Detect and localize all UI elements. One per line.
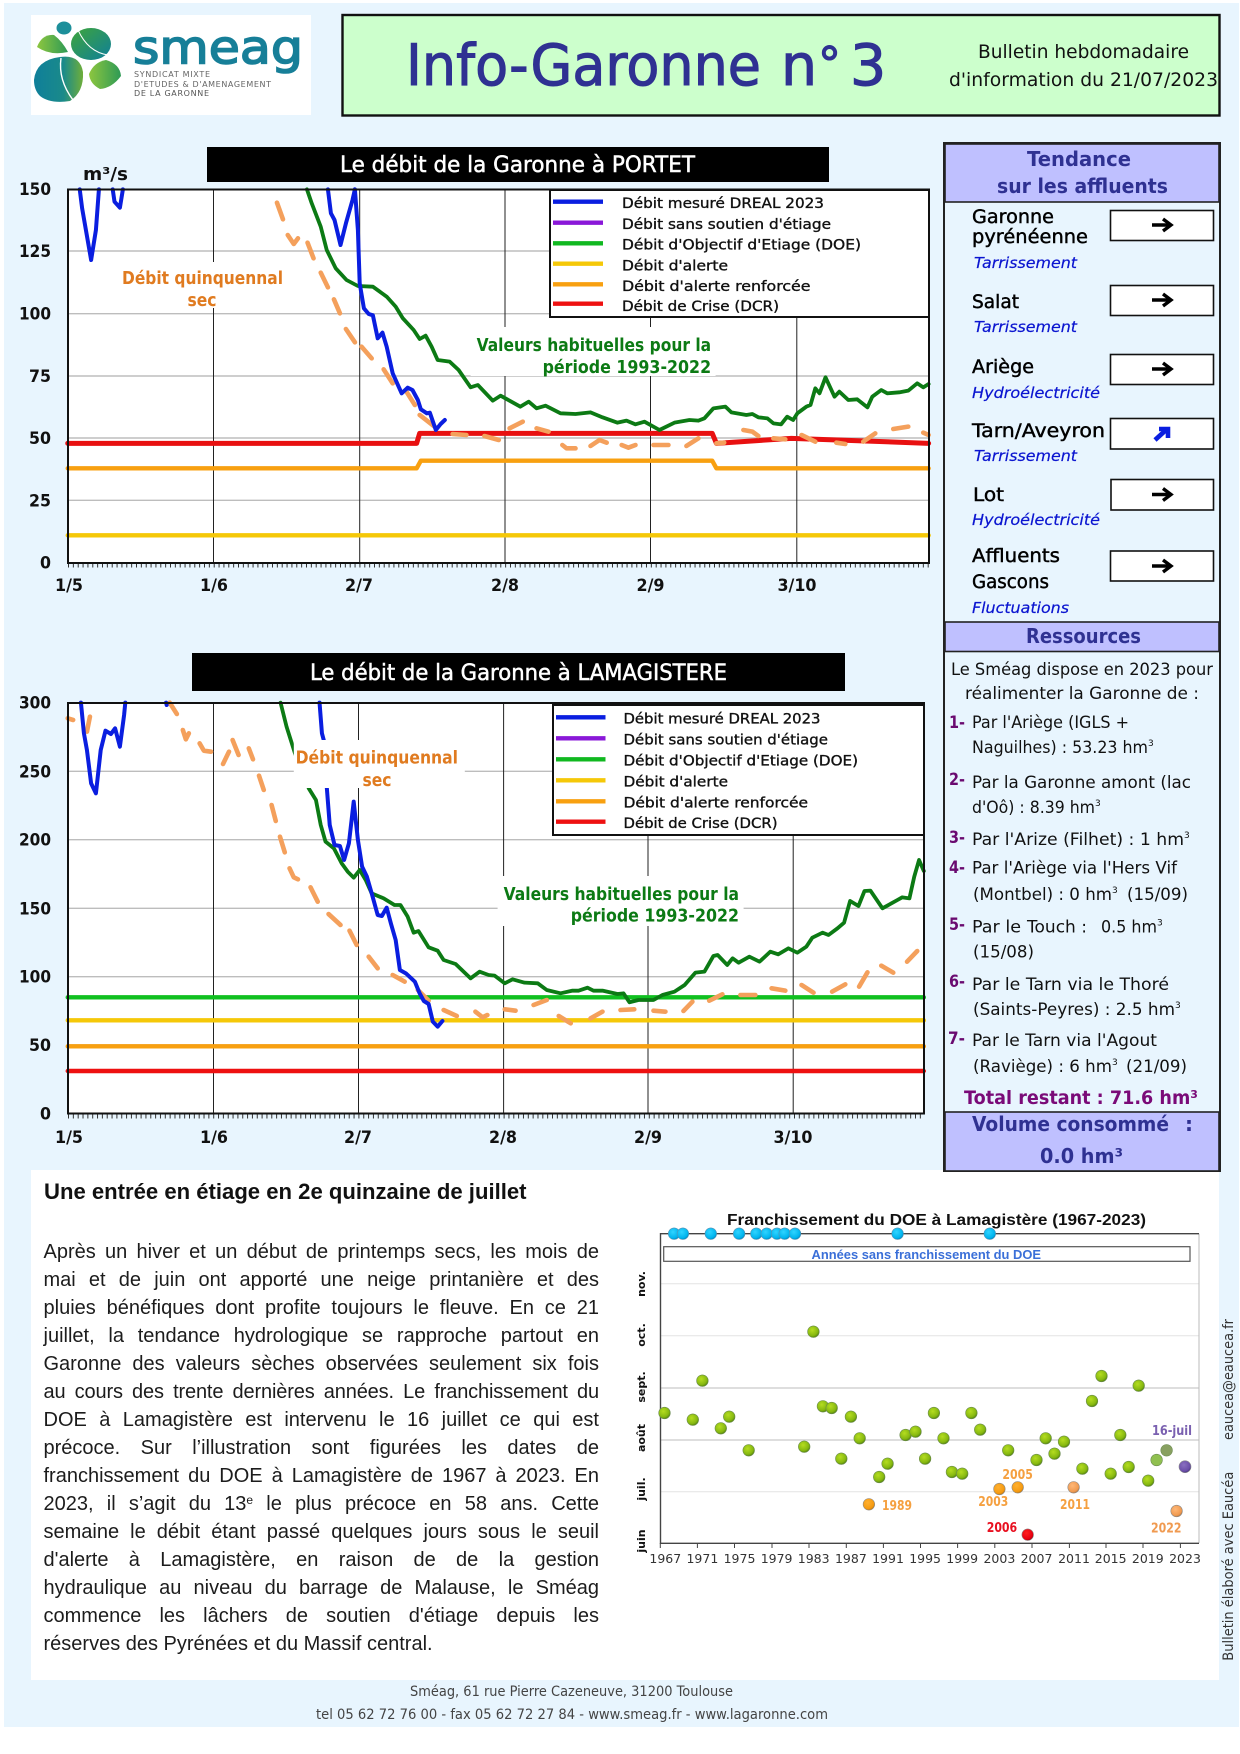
text block: commentary paragraph: d'alerte à Lamagistère, en raison de de la gestion	[44, 1549, 599, 1571]
resource list: 0.5 hm	[1101, 918, 1157, 938]
x axis labels: 3/10	[778, 576, 817, 596]
y axis labels: 75	[29, 367, 51, 387]
y axis labels: 50	[29, 1036, 51, 1056]
year axis labels: 2019	[1132, 1551, 1164, 1566]
legend: Débit d'alerte renforcée	[622, 279, 810, 295]
row: Affluents Gascons: Fluctuations	[972, 599, 1069, 617]
resource list: 4-	[949, 858, 965, 878]
resource list: Par l'Ariège (IGLS +	[972, 713, 1129, 733]
legend: Débit d'alerte	[624, 774, 728, 790]
x axis labels: 2/8	[491, 576, 519, 596]
footer contact: Sméag, 61 rue Pierre Cazeneuve, 31200 Toulouse	[410, 1684, 733, 1700]
row: Salat: Tarrissement	[974, 318, 1078, 336]
annotation: five-year dry flow: Débit quinquennal	[296, 748, 458, 769]
y axis labels	[19, 694, 51, 1124]
text block: commentary paragraph: semaine le débit étant passé quelques jours sous le seuil	[44, 1521, 599, 1543]
year callouts: 2022	[1151, 1522, 1182, 1537]
logo	[31, 15, 311, 115]
row: Lot	[972, 480, 1214, 529]
logo: SYNDICAT MIXTE	[134, 70, 210, 79]
y axis labels: 300	[19, 694, 51, 714]
annotation: five-year dry flow	[114, 262, 288, 311]
panel: commentary white background	[31, 1170, 1219, 1680]
year callouts: 16-juil	[1152, 1424, 1192, 1439]
header banner	[342, 15, 1220, 116]
axes frame	[68, 190, 929, 563]
y axis labels: 25	[29, 491, 51, 511]
usual values green line	[307, 189, 929, 430]
chart title: Le débit de la Garonne à PORTET	[340, 153, 696, 178]
legend: Débit sans soutien d'étiage	[622, 217, 831, 233]
legend: Débit d'Objectif d'Etiage (DOE)	[624, 754, 858, 770]
resource list: Par le Tarn via l'Agout	[972, 1031, 1157, 1051]
axes frame	[68, 703, 924, 1114]
threshold: red crisis flow	[68, 433, 929, 443]
resource list: (15/08)	[973, 942, 1034, 962]
y axis labels: 100	[19, 305, 51, 325]
legend: Débit mesuré DREAL 2023	[624, 712, 820, 728]
text block: commentary paragraph: précoce. Sur l’illustration sont figurées les dates de	[44, 1437, 599, 1459]
row: Ariège: Ariège	[972, 356, 1034, 378]
month axis labels: juin	[635, 1529, 648, 1554]
year axis labels: 1987	[835, 1551, 867, 1566]
resource list: (21/09)	[1126, 1057, 1187, 1077]
resource list: Par le	[972, 918, 1021, 938]
credits vertical text	[1221, 1319, 1237, 1661]
credits vertical text: eaucea@eaucea.fr	[1221, 1319, 1237, 1440]
year axis labels: 2011	[1058, 1551, 1090, 1566]
unit: m³/s	[83, 164, 128, 185]
y axis labels: 125	[19, 242, 51, 262]
text block: commentary paragraph: hydraulique au niveau du barrage de Malause, le Sméag	[44, 1577, 599, 1599]
text block: commentary paragraph: pluies bénéfiques dont profite toujours le fleuve. En ce 21	[44, 1297, 599, 1319]
chart title	[207, 147, 829, 182]
bulletin date: Bulletin hebdomadaire	[978, 41, 1189, 63]
highlighted years	[863, 1461, 1191, 1540]
annotation: usual values: Valeurs habituelles pour la	[477, 335, 711, 356]
year axis labels: 1995	[909, 1551, 941, 1566]
month axis labels: juil.	[635, 1477, 648, 1502]
years without crossing markers	[668, 1228, 996, 1239]
resource list: 6-	[949, 972, 965, 992]
annotation: usual values	[498, 876, 744, 927]
year axis labels	[649, 1551, 1201, 1566]
legend: Débit d'Objectif d'Etiage (DOE)	[622, 238, 861, 254]
heading: tributary trend: sur les affluents	[997, 174, 1168, 198]
row: Garonne pyrénéenne: Garonne	[972, 206, 1054, 228]
threshold: reinforced alert	[68, 1044, 924, 1049]
resource list: 7-	[948, 1029, 965, 1049]
plot area	[68, 703, 924, 1114]
year axis labels: 1991	[872, 1551, 904, 1566]
text block: commentary paragraph: DOE à Lamagistère est intervenu le 16 juillet ce qui est	[44, 1409, 599, 1431]
text block: commentary paragraph	[43, 1241, 599, 1655]
row: Lot: Lot	[973, 484, 1004, 506]
text block: commentary paragraph: franchissement du DOE à Lamagistère de 1967 à 2023. En	[44, 1465, 599, 1487]
year callouts: 2006	[987, 1521, 1017, 1536]
month axis labels: oct.	[635, 1323, 648, 1347]
chart title: Franchissement du DOE à Lamagistère (1967-2023)	[727, 1212, 1146, 1229]
row: Ariège: Hydroélectricité	[972, 384, 1100, 402]
resource list: 3	[1112, 886, 1118, 896]
year callouts: 2011	[1060, 1498, 1090, 1513]
year axis labels: 2015	[1095, 1551, 1127, 1566]
resource list: d'Oô) : 8.39 hm	[972, 798, 1095, 818]
year axis labels: 1999	[946, 1551, 978, 1566]
chart title: Le débit de la Garonne à LAMAGISTERE	[310, 661, 727, 686]
volume consumed: :	[1185, 1112, 1193, 1136]
resource list: Touch :	[1026, 918, 1087, 938]
plot area	[68, 189, 929, 563]
text block: commentary paragraph: Garonne des valeurs sèches observées seulement six fois	[44, 1353, 599, 1375]
row: Affluents Gascons: Affluents	[972, 545, 1060, 567]
heading: tributary trend	[945, 144, 1219, 202]
y axis labels: 0	[40, 554, 51, 574]
volume consumed	[945, 1112, 1219, 1171]
title: °	[818, 37, 841, 91]
annotation: five-year dry flow: sec	[188, 290, 216, 311]
no-crossing box	[664, 1247, 1190, 1262]
resource list	[948, 713, 1191, 1077]
annotation: usual values: période 1993-2022	[543, 357, 711, 378]
year axis labels: 1979	[761, 1551, 793, 1566]
annotation: usual values: période 1993-2022	[571, 906, 739, 927]
resource list: Par l'Arize (Filhet) : 1 hm	[972, 830, 1184, 850]
no-crossing box: Années sans franchissement du DOE	[812, 1248, 1041, 1262]
row: Ariège	[972, 354, 1214, 402]
row: Tarn/Aveyron: Tarrissement	[974, 447, 1078, 465]
legend	[550, 190, 929, 317]
panel: tributary trends and resources	[944, 143, 1220, 1171]
logo: D'ETUDES & D'AMENAGEMENT	[134, 80, 271, 89]
legend	[553, 705, 924, 835]
y axis labels: 200	[19, 831, 51, 851]
x axis labels: 1/5	[55, 576, 83, 596]
data lines	[68, 703, 924, 1071]
heading: resources: Ressources	[1026, 624, 1141, 648]
annotation: five-year dry flow: sec	[362, 770, 392, 791]
x axis labels: 2/8	[489, 1128, 517, 1148]
row: Garonne pyrénéenne: pyrénéenne	[972, 226, 1088, 248]
x axis labels: 2/7	[344, 1128, 372, 1148]
row: Salat: Salat	[972, 291, 1019, 313]
title: Info-Garonne	[406, 33, 761, 99]
heading: resources	[945, 622, 1219, 652]
resource list: Par l'Ariège via l'Hers Vif	[972, 858, 1178, 878]
resource list: 3	[1148, 739, 1154, 749]
chart: Lamagistere flow	[19, 653, 924, 1148]
resource list: (Raviège) : 6 hm	[973, 1057, 1112, 1077]
bulletin date	[949, 41, 1218, 91]
row: Garonne pyrénéenne	[972, 206, 1214, 272]
legend: Débit de Crise (DCR)	[622, 299, 779, 315]
year axis labels: 2003	[983, 1551, 1015, 1566]
y axis labels: 150	[19, 899, 51, 919]
month axis labels	[635, 1271, 648, 1554]
threshold: reinforced alert	[68, 461, 929, 468]
resource list: 1-	[949, 713, 965, 733]
row: Salat	[972, 286, 1214, 336]
row: Tarn/Aveyron	[971, 418, 1214, 465]
legend: Débit mesuré DREAL 2023	[622, 196, 824, 212]
annotation: five-year dry flow: Débit quinquennal	[122, 268, 283, 289]
resource list: 3-	[949, 828, 965, 848]
month axis labels: août	[635, 1424, 648, 1452]
y axis labels: 100	[19, 968, 51, 988]
resource list: 3	[1095, 799, 1101, 809]
year callouts: 1989	[882, 1499, 912, 1514]
quinquennial dashed	[277, 203, 929, 448]
measured flow blue line	[81, 703, 442, 1027]
footer contact	[316, 1684, 828, 1723]
resource list: 5-	[949, 915, 965, 935]
legend: Débit d'alerte renforcée	[624, 796, 808, 812]
text: resources intro: réalimenter la Garonne de :	[965, 684, 1199, 704]
year callouts: 2005	[1002, 1468, 1033, 1483]
annotation: five-year dry flow	[294, 740, 465, 791]
footer contact: tel 05 62 72 76 00 - fax 05 62 72 27 84 - www.smeag.fr - www.lagaronne.com	[316, 1707, 828, 1723]
text: resources intro: Le Sméag dispose en 2023 pour	[951, 660, 1213, 680]
volume consumed: 0.0 hm³	[1040, 1144, 1123, 1168]
threshold: alert	[68, 1018, 924, 1023]
text block: commentary paragraph: 2023, il s’agit du 13e le plus précoce en 58 ans. Cette	[44, 1493, 599, 1515]
x axis labels: 1/6	[200, 576, 228, 596]
title: 3	[850, 33, 886, 99]
row: Affluents Gascons: Gascons	[972, 571, 1049, 593]
y axis labels: 150	[19, 180, 51, 200]
heading: commentary: Une entrée en étiage en 2e quinzaine de juillet	[44, 1179, 527, 1204]
year callouts: 2003	[978, 1495, 1008, 1510]
resource list: Par le Tarn via le Thoré	[972, 975, 1169, 995]
credits vertical text: Bulletin élaboré avec Eaucéa	[1221, 1472, 1237, 1661]
year axis labels: 1971	[686, 1551, 718, 1566]
y axis labels: 0	[40, 1104, 51, 1124]
volume consumed: Volume consommé	[972, 1112, 1169, 1136]
legend: Débit de Crise (DCR)	[624, 816, 778, 832]
logo: DE LA GARONNE	[134, 89, 209, 98]
y axis labels: 250	[19, 762, 51, 782]
yearly crossing markers	[659, 1326, 1172, 1486]
year axis labels: 1975	[724, 1551, 755, 1566]
chart: DOE crossing dates	[635, 1212, 1201, 1566]
measured flow blue line	[80, 189, 445, 430]
annotation: usual values: Valeurs habituelles pour la	[504, 884, 739, 905]
quinquennial dashed	[68, 703, 917, 1023]
resource list: 3	[1184, 831, 1190, 841]
year axis labels: 2023	[1169, 1551, 1201, 1566]
x axis labels: 2/9	[636, 576, 664, 596]
resource list: (Saints-Peyres) : 2.5 hm	[973, 1000, 1175, 1020]
text block: commentary paragraph: réserves des Pyrénées et du Massif central.	[44, 1633, 433, 1655]
text block: commentary paragraph: commence les lâchers de soutien d'étiage depuis les	[44, 1605, 599, 1627]
x axis labels: 3/10	[774, 1128, 813, 1148]
x axis labels: 2/9	[634, 1128, 662, 1148]
threshold: crisis	[68, 1069, 924, 1073]
text block: commentary paragraph: au cours des trente dernières années. Le franchissement du	[44, 1381, 599, 1403]
resource list: Par la Garonne amont (lac	[972, 773, 1191, 793]
threshold: DOE	[68, 995, 924, 1000]
text block: commentary paragraph: juillet, la tendance hydrologique se rapproche partout en	[44, 1325, 599, 1347]
legend: Débit sans soutien d'étiage	[624, 732, 828, 748]
title: n	[781, 33, 817, 99]
resource list: 3	[1157, 918, 1163, 928]
row: Garonne pyrénéenne: Tarrissement	[974, 254, 1078, 272]
chart: Portet flow	[19, 147, 929, 596]
resource list: Naguilhes) : 53.23 hm	[972, 738, 1148, 758]
row: Lot: Hydroélectricité	[972, 511, 1100, 529]
year axis labels: 2007	[1021, 1551, 1052, 1566]
chart title	[192, 653, 845, 691]
year axis labels: 1967	[649, 1551, 681, 1566]
x axis labels	[55, 1128, 813, 1148]
resource list: 3	[1112, 1058, 1118, 1068]
resource list: (Montbel) : 0 hm	[973, 885, 1112, 905]
month axis labels: sept.	[635, 1371, 648, 1403]
y axis labels: 50	[29, 429, 51, 449]
month axis labels: nov.	[635, 1271, 648, 1297]
annotation: usual values	[471, 327, 716, 378]
x axis labels	[55, 576, 817, 596]
resource list: (15/09)	[1127, 885, 1188, 905]
bulletin date: d'information du 21/07/2023	[949, 69, 1218, 91]
x axis labels: 1/5	[55, 1128, 83, 1148]
resource list: 2-	[949, 770, 965, 790]
year axis labels: 1983	[798, 1551, 830, 1566]
year callouts	[882, 1424, 1192, 1537]
usual values green line	[281, 703, 924, 1002]
threshold: alert	[68, 533, 929, 538]
resource list: 3	[1175, 1001, 1181, 1011]
legend: Débit d'alerte	[622, 258, 728, 274]
x axis labels: 1/6	[200, 1128, 228, 1148]
total remaining: Total restant : 71.6 hm³	[964, 1087, 1198, 1109]
text block: commentary paragraph: Après un hiver et un début de printemps secs, les mois de	[44, 1241, 599, 1263]
logo: smeag	[133, 20, 303, 74]
row: Affluents Gascons	[972, 545, 1214, 617]
y axis labels	[19, 180, 51, 574]
heading: tributary trend: Tendance	[1027, 147, 1131, 171]
row: Tarn/Aveyron: Tarn/Aveyron	[971, 420, 1105, 442]
data lines	[68, 189, 929, 535]
text: resources intro	[951, 660, 1213, 704]
x axis labels: 2/7	[345, 576, 373, 596]
text block: commentary paragraph: mai et de juin ont apporté une neige printanière et des	[44, 1269, 599, 1291]
